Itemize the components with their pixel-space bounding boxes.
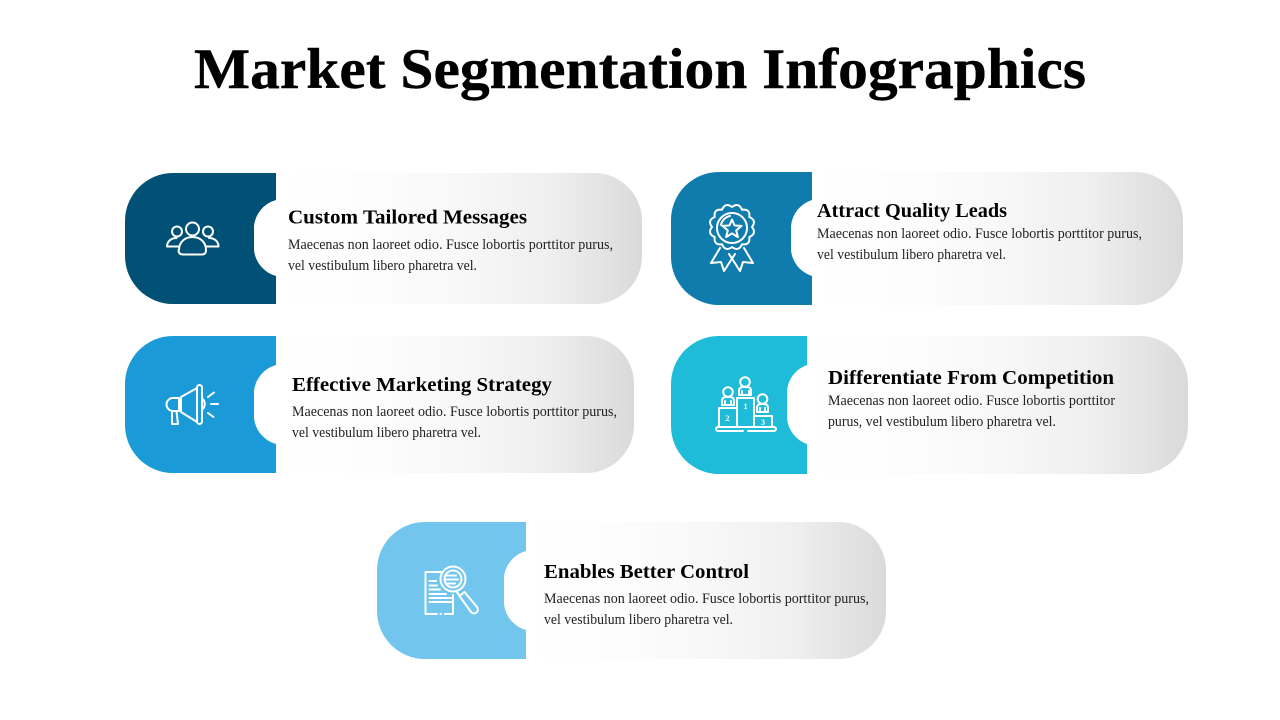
icon: award medal (710, 205, 754, 271)
body text (828, 393, 1115, 430)
panel: custom tailored messages (125, 173, 642, 304)
panel: attract quality leads (671, 172, 1183, 305)
podium numbers: 1 (743, 401, 748, 411)
body text: purus, vel vestibulum libero pharetra vel. (828, 414, 1056, 430)
body text: Maecenas non laoreet odio. Fusce lobortis porttitor purus, (288, 237, 613, 253)
pill background (807, 336, 1188, 474)
body text: vel vestibulum libero pharetra vel. (817, 247, 1006, 263)
panel: effective marketing strategy (125, 336, 634, 473)
body text: Maecenas non laoreet odio. Fusce lobortis porttitor purus, (817, 226, 1142, 242)
podium numbers: 3 (761, 417, 765, 427)
icon: people (167, 222, 218, 254)
body text: vel vestibulum libero pharetra vel. (544, 612, 733, 628)
pill background (276, 173, 642, 304)
heading: Effective Marketing Strategy (292, 374, 553, 396)
pill background (812, 172, 1183, 305)
coloured tab (125, 336, 276, 473)
icon: podium (716, 377, 776, 431)
heading: Enables Better Control (544, 561, 749, 583)
icon: megaphone (166, 385, 218, 424)
body text: vel vestibulum libero pharetra vel. (288, 258, 477, 274)
body text: Maecenas non laoreet odio. Fusce lobortis porttitor (828, 393, 1115, 409)
body text: vel vestibulum libero pharetra vel. (292, 425, 481, 441)
body text (544, 591, 869, 628)
title: Market Segmentation Infographics (194, 38, 1086, 101)
body text (288, 237, 613, 274)
podium numbers: 2 (725, 413, 730, 423)
coloured tab (671, 336, 807, 474)
coloured tab (125, 173, 276, 304)
panel: differentiate from competition (671, 336, 1188, 474)
heading: Attract Quality Leads (817, 200, 1007, 222)
panel: enables better control (377, 522, 886, 659)
pill background (526, 522, 886, 659)
body text (292, 404, 617, 441)
coloured tab (377, 522, 526, 659)
pill background (276, 336, 634, 473)
body text: Maecenas non laoreet odio. Fusce lobortis porttitor purus, (292, 404, 617, 420)
podium numbers (725, 401, 765, 427)
icon: document with magnifier (426, 566, 478, 614)
heading: Custom Tailored Messages (288, 206, 527, 228)
coloured tab (671, 172, 812, 305)
heading: Differentiate From Competition (828, 367, 1115, 389)
body text: Maecenas non laoreet odio. Fusce lobortis porttitor purus, (544, 591, 869, 607)
body text (817, 226, 1142, 263)
